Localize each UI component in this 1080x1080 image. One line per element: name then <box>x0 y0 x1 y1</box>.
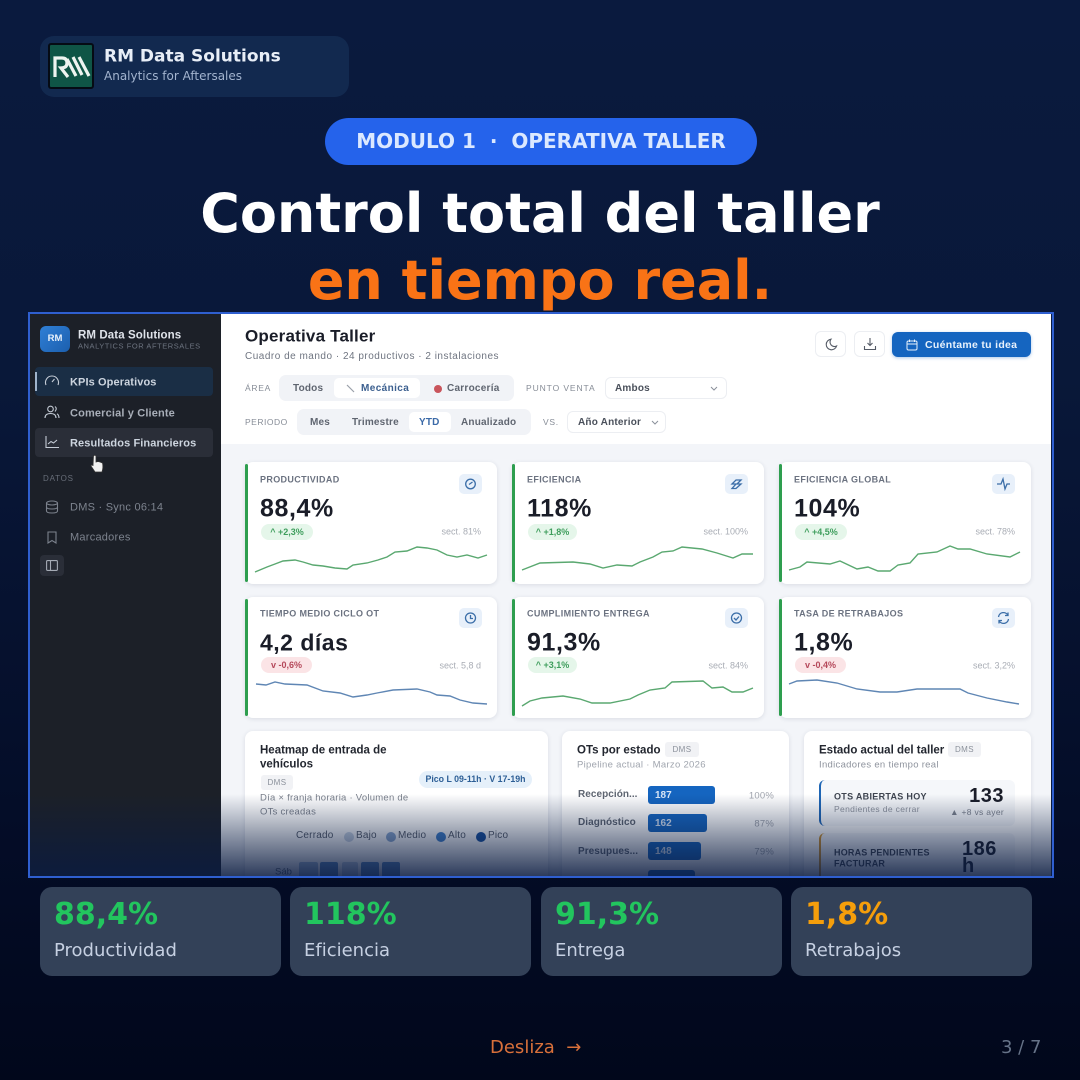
title: en tiempo real. <box>308 249 772 312</box>
filter group: area: Mecánica <box>361 383 409 394</box>
KPI card: cumplimiento entrega <box>512 597 764 718</box>
panel: OTs por estado: 79% <box>754 846 774 857</box>
panel: OTs por estado: DMS <box>672 745 691 754</box>
stat card: productividad: 88,4% <box>54 897 158 932</box>
KPI card: productividad: sect. 81% <box>441 526 481 536</box>
filter label: periodo: PERIODO <box>245 417 288 427</box>
swipe prompt: Desliza → <box>490 1037 581 1058</box>
panel: OTs por estado: Diagnóstico <box>578 817 636 828</box>
panel: sidebar <box>30 314 221 876</box>
stat card: eficiencia: Eficiencia <box>304 940 390 961</box>
panel: heatmap: Heatmap de entrada de <box>260 744 387 756</box>
KPI card: tasa de retrabajos <box>779 597 1031 718</box>
KPI card: tiempo medio ciclo <box>245 597 497 718</box>
title <box>200 182 880 312</box>
brand tagline: Analytics for Aftersales <box>104 69 242 83</box>
KPI card: eficiencia: 118% <box>527 494 592 522</box>
KPI card: tiempo medio ciclo: 4,2 días <box>260 630 348 656</box>
KPI card: eficiencia global: 104% <box>794 494 860 522</box>
panel: OTs por estado: 148 <box>655 846 672 857</box>
KPI card: eficiencia global: EFICIENCIA GLOBAL <box>794 474 891 484</box>
icon: download button <box>854 331 885 357</box>
indicator: OTs abiertas: Pendientes de cerrar <box>834 804 920 814</box>
filter group: periodo: YTD <box>419 417 440 428</box>
filter group: area: Carrocería <box>447 383 500 394</box>
nav item: Comercial y Cliente <box>44 406 175 420</box>
KPI card: tiempo medio ciclo: sect. 5,8 d <box>439 660 481 670</box>
indicator: horas pendientes: h <box>962 855 974 877</box>
stat card: eficiencia: 118% <box>304 897 397 932</box>
page heading: Operativa Taller <box>245 326 375 346</box>
stat card: productividad <box>40 887 281 976</box>
brand name: RM Data Solutions <box>104 46 281 66</box>
panel: estado actual del taller: DMS <box>955 745 974 754</box>
indicator: OTs abiertas: 133 <box>969 785 1004 807</box>
stat card: retrabajos <box>791 887 1032 976</box>
nav item: KPIs Operativos: KPIs Operativos <box>70 376 156 388</box>
select: año anterior <box>567 411 666 433</box>
page counter: 3 / 7 <box>1001 1037 1041 1058</box>
panel: estado actual del taller: Indicadores en tiempo real <box>819 759 939 770</box>
panel: estado actual del taller <box>804 731 1031 891</box>
panel: heatmap: Medio <box>398 830 426 841</box>
panel: OTs por estado: Recepción... <box>578 789 638 800</box>
panel: heatmap: Sáb <box>275 866 292 877</box>
panel: heatmap: DMS <box>268 778 286 787</box>
KPI card: eficiencia: EFICIENCIA <box>527 474 582 484</box>
sidebar tagline: ANALYTICS FOR AFTERSALES <box>78 341 201 350</box>
KPI card: cumplimiento entrega: 91,3% <box>527 628 601 656</box>
stat card: retrabajos: Retrabajos <box>805 940 901 961</box>
KPI card: cumplimiento entrega: CUMPLIMIENTO ENTREGA <box>527 608 650 618</box>
KPI card: productividad: 88,4% <box>260 494 334 522</box>
filter group: periodo: Mes <box>310 417 330 428</box>
stat card: entrega: 91,3% <box>555 897 659 932</box>
icon: hand cursor <box>90 455 104 472</box>
indicator: horas pendientes <box>819 833 1015 893</box>
stat card: productividad: Productividad <box>54 940 177 961</box>
KPI card: eficiencia: sect. 100% <box>703 526 748 536</box>
icon: theme button <box>815 331 846 357</box>
panel: heatmap: OTs creadas <box>260 806 316 817</box>
KPI card: tiempo medio ciclo: v -0,6% <box>271 660 302 670</box>
panel: main background <box>221 314 1051 876</box>
nav item: Comercial y Cliente: Comercial y Cliente <box>70 408 175 420</box>
KPI card: productividad: ^ +2,3% <box>270 527 304 537</box>
KPI card: tiempo medio ciclo: TIEMPO MEDIO CICLO OT <box>260 608 379 618</box>
call to action button: Cuéntame tu idea <box>925 339 1017 351</box>
KPI card: eficiencia: ^ +1,8% <box>536 527 569 537</box>
icon: RM logo <box>48 43 94 89</box>
select: año anterior: Año Anterior <box>578 417 641 428</box>
filter group: periodo <box>297 409 531 435</box>
panel: heatmap: vehículos <box>260 758 313 770</box>
KPI card: eficiencia global: sect. 78% <box>975 526 1015 536</box>
filter group: area: Todos <box>293 383 323 394</box>
indicator: OTs abiertas <box>819 780 1015 826</box>
KPI card: cumplimiento entrega: ^ +3,1% <box>536 660 569 670</box>
panel: OTs por estado: 100% <box>749 790 774 801</box>
title: Control total del taller <box>200 182 880 245</box>
icon: sidebar logo: RM <box>48 333 62 344</box>
panel: heatmap: Bajo <box>356 830 377 841</box>
KPI card: tasa de retrabajos: v -0,4% <box>805 660 836 670</box>
nav item: Marcadores <box>47 532 131 544</box>
stat card: entrega: Entrega <box>555 940 625 961</box>
nav item: Marcadores: Marcadores <box>70 532 131 544</box>
indicator: OTs abiertas: ▲ +8 vs ayer <box>950 807 1004 817</box>
stat card: eficiencia <box>290 887 531 976</box>
panel: heatmap: Pico <box>488 830 508 841</box>
indicator: OTs abiertas: OTS ABIERTAS HOY <box>834 792 927 802</box>
filter label: vs: VS. <box>543 417 559 427</box>
indicator: horas pendientes: 186 <box>962 838 997 860</box>
panel: OTs por estado: 187 <box>655 790 672 801</box>
panel: top toolbar <box>221 314 1051 444</box>
section label: datos: DATOS <box>43 474 74 483</box>
KPI card: cumplimiento entrega: sect. 84% <box>708 660 748 670</box>
brand header <box>40 36 349 97</box>
KPI card: tasa de retrabajos: sect. 3,2% <box>973 660 1015 670</box>
indicator: horas pendientes: FACTURAR <box>834 858 885 868</box>
panel: estado actual del taller: Estado actual del taller <box>819 744 944 756</box>
stat card: entrega <box>541 887 782 976</box>
stat card: retrabajos: 1,8% <box>805 897 888 932</box>
filter label: punto venta: PUNTO VENTA <box>526 383 596 393</box>
panel: heatmap: Cerrado <box>296 830 334 841</box>
filter group: area <box>279 375 514 401</box>
KPI card: productividad <box>245 462 497 584</box>
panel: OTs por estado: 162 <box>655 818 672 829</box>
panel: OTs por estado: 87% <box>754 818 774 829</box>
icon: sidebar logo <box>40 326 70 352</box>
icon: collapse button <box>40 555 64 576</box>
filter label: area: ÁREA <box>245 383 271 393</box>
filter group: periodo: Trimestre <box>352 417 399 428</box>
KPI card: tasa de retrabajos: TASA DE RETRABAJOS <box>794 608 903 618</box>
page subtitle: Cuadro de mando · 24 productivos · 2 instalaciones <box>245 351 499 362</box>
call to action button <box>892 332 1031 357</box>
panel: OTs por estado: Pipeline actual · Marzo 2026 <box>577 759 706 770</box>
KPI card: productividad: PRODUCTIVIDAD <box>260 474 340 484</box>
sidebar brand name: RM Data Solutions <box>78 329 181 341</box>
nav item: DMS sync: DMS · Sync 06:14 <box>70 502 163 514</box>
dashboard screenshot <box>28 312 1054 878</box>
panel: OTs por estado <box>562 731 789 891</box>
module pill: MODULO 1 · OPERATIVA TALLER <box>356 129 726 153</box>
module pill <box>325 118 757 165</box>
nav item: KPIs Operativos <box>35 367 213 396</box>
nav item: Resultados Financieros <box>35 428 213 457</box>
bottom fade overlay <box>30 794 1054 878</box>
filter group: periodo: Anualizado <box>461 417 516 428</box>
select: ambos: Ambos <box>615 383 650 394</box>
KPI card: eficiencia global <box>779 462 1031 584</box>
KPI card: eficiencia global: ^ +4,5% <box>804 527 838 537</box>
nav item: Resultados Financieros: Resultados Financieros <box>70 438 196 450</box>
panel: heatmap: Pico L 09-11h · V 17-19h <box>425 774 526 784</box>
panel: heatmap: Alto <box>448 830 466 841</box>
KPI card: eficiencia <box>512 462 764 584</box>
panel: OTs por estado: OTs por estado <box>577 744 660 756</box>
panel: heatmap <box>245 731 548 891</box>
panel: OTs por estado: Presupues... <box>578 846 638 857</box>
KPI card: tasa de retrabajos: 1,8% <box>794 628 853 656</box>
indicator: horas pendientes: HORAS PENDIENTES <box>834 848 930 858</box>
select: ambos <box>605 377 727 399</box>
panel: heatmap: Día × franja horaria · Volumen de <box>260 792 408 803</box>
